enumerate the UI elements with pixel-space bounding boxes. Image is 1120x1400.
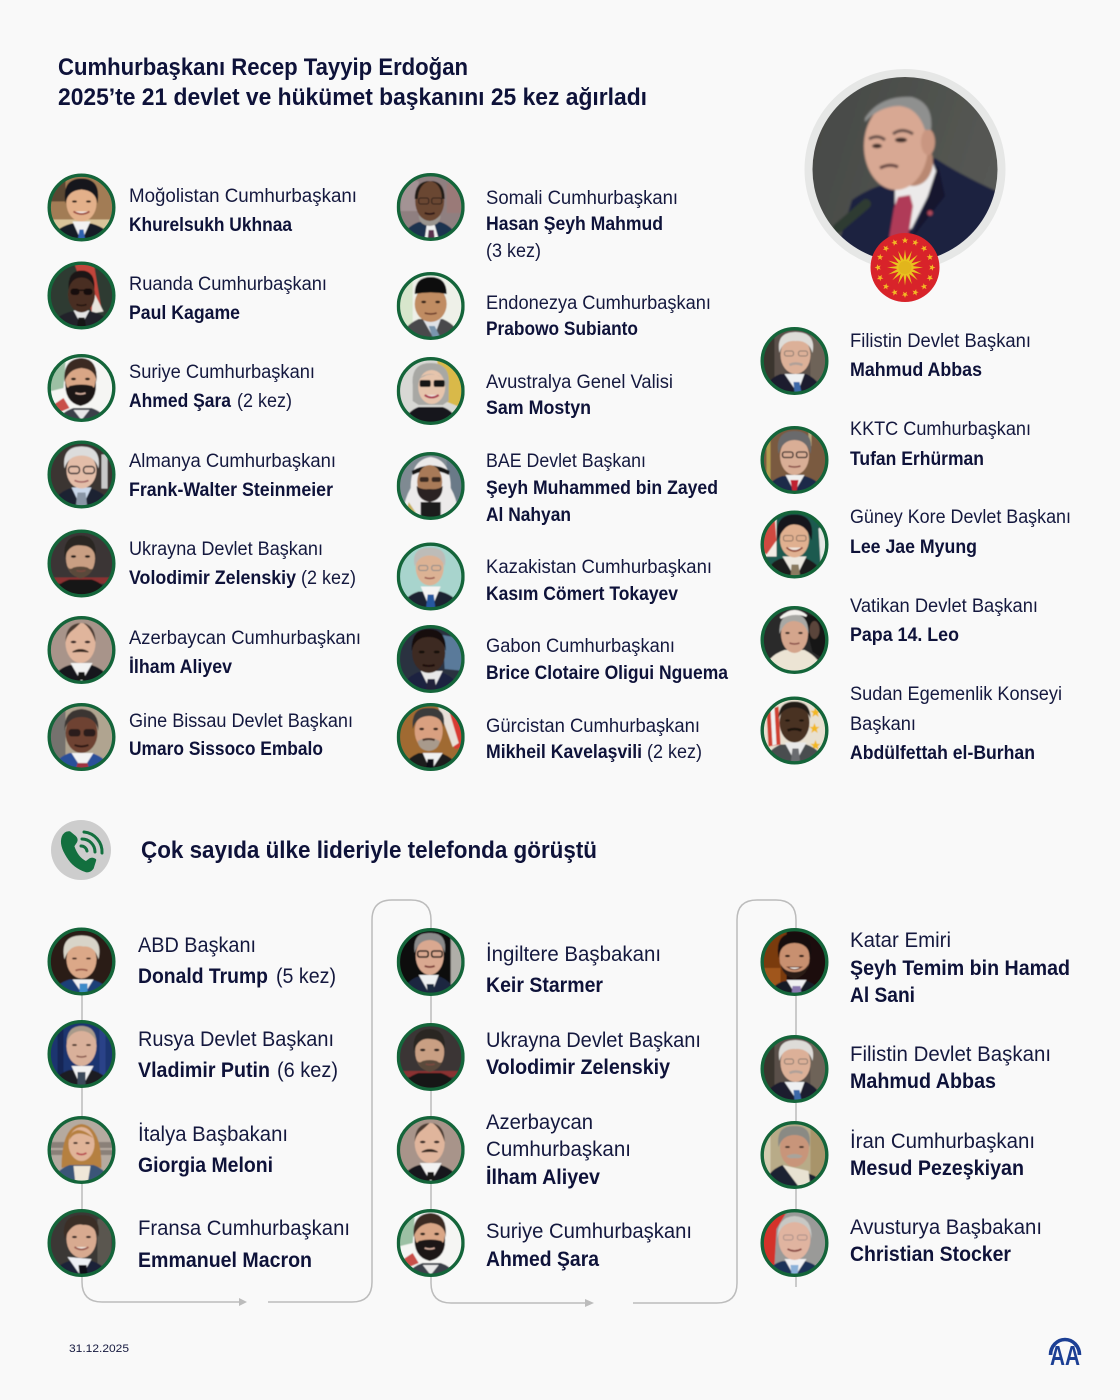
person: Frank-Walter Steinmeier [48,440,336,508]
person: Volodimir Zelenskiy (call): Volodimir Zelenskiy [486,1055,670,1079]
person: Lee Jae Myung: Güney Kore Devlet Başkanı [850,507,1071,528]
icon: presidential seal [870,233,940,302]
person: Umaro Sissoco Embalo: Umaro Sissoco Embalo [129,739,323,760]
title: 2025’te 21 devlet ve hükümet başkanını 25 kez ağırladı [58,84,647,111]
person: Donald Trump: Donald Trump [138,964,268,988]
person: Vladimir Putin [48,1020,338,1088]
person: Prabowo Subianto: Prabowo Subianto [486,319,638,340]
arrow: connector from column 1 [82,990,247,1306]
person: Frank-Walter Steinmeier: Frank-Walter Steinmeier [129,480,334,501]
person: Brice Clotaire Oligui Nguema [397,625,728,693]
logo: AA: AA [1050,1340,1080,1371]
person: Khurelsukh Ukhnaa: Moğolistan Cumhurbaşkanı [129,186,357,207]
person: Ahmed Şara (call): Ahmed Şara [486,1247,600,1271]
person: Abdülfettah el-Burhan: Başkanı [850,714,916,735]
person: Ahmed Şara (call): Suriye Cumhurbaşkanı [486,1219,692,1243]
person: Volodimir Zelenskiy: Volodimir Zelenskiy [129,568,296,589]
person: Hasan Şeyh Mahmud: Somali Cumhurbaşkanı [486,188,678,209]
person: Donald Trump: (5 kez) [276,964,336,988]
person: Giorgia Meloni: Giorgia Meloni [138,1153,273,1177]
panel: calls column 2 [397,928,701,1277]
person: Şeyh Temim bin Hamad Al Sani: Şeyh Temim bin Hamad [850,956,1070,980]
person: Volodimir Zelenskiy [48,530,356,598]
person: Volodimir Zelenskiy: Ukrayna Devlet Başkanı [129,539,323,560]
person: İlham Aliyev (call): Cumhurbaşkanı [486,1137,631,1161]
person: Papa 14. Leo: Papa 14. Leo [850,625,959,646]
person: Şeyh Temim bin Hamad Al Sani [760,928,1070,1007]
person: Umaro Sissoco Embalo: Gine Bissau Devlet Başkanı [129,711,353,732]
person: Şeyh Muhammed bin Zayed Al Nahyan: BAE Devlet Başkanı [486,451,646,472]
icon: phone [51,820,111,880]
person: Şeyh Muhammed bin Zayed Al Nahyan: Şeyh Muhammed bin Zayed [486,478,718,499]
person: Abdülfettah el-Burhan [760,684,1062,764]
person: Keir Starmer: İngiltere Başbakanı [486,942,661,966]
person: Mesud Pezeşkiyan [760,1121,1035,1189]
person: İlham Aliyev: Azerbaycan Cumhurbaşkanı [129,628,361,649]
date: 31.12.2025 [69,1343,129,1355]
panel: guests column 3 [760,327,1071,764]
person: Mahmud Abbas [760,327,1031,395]
person: Mesud Pezeşkiyan: Mesud Pezeşkiyan [850,1156,1024,1180]
person: Emmanuel Macron [48,1209,350,1277]
person: Hasan Şeyh Mahmud: Hasan Şeyh Mahmud [486,214,663,235]
person: Keir Starmer: Keir Starmer [486,973,604,997]
person: Khurelsukh Ukhnaa [48,174,357,242]
person: Ahmed Şara: Suriye Cumhurbaşkanı [129,362,315,383]
person: Vladimir Putin: Vladimir Putin [138,1058,270,1082]
person: Tufan Erhürman: Tufan Erhürman [850,449,984,470]
person: Kasım Cömert Tokayev: Kazakistan Cumhurbaşkanı [486,557,712,578]
person: Ahmed Şara [48,354,315,422]
person: Şeyh Temim bin Hamad Al Sani: Katar Emiri [850,928,951,952]
person: Mahmud Abbas (call) [760,1035,1051,1103]
person: Şeyh Temim bin Hamad Al Sani: Al Sani [850,983,915,1007]
person: İlham Aliyev: İlham Aliyev [129,657,232,678]
person: Umaro Sissoco Embalo [48,703,353,771]
heading: phone calls: Çok sayıda ülke lideriyle telefonda görüştü [141,837,597,864]
person: Şeyh Muhammed bin Zayed Al Nahyan: Al Nahyan [486,505,571,526]
person: Mahmud Abbas (call): Mahmud Abbas [850,1069,996,1093]
person: Lee Jae Myung: Lee Jae Myung [850,537,977,558]
person: Khurelsukh Ukhnaa: Khurelsukh Ukhnaa [129,215,292,236]
person: Mahmud Abbas: Mahmud Abbas [850,360,982,381]
person: Brice Clotaire Oligui Nguema: Brice Clotaire Oligui Nguema [486,663,728,684]
person: Keir Starmer [397,928,661,997]
person: Papa 14. Leo [760,596,1038,674]
person: Emmanuel Macron: Fransa Cumhurbaşkanı [138,1216,350,1240]
person: Paul Kagame: Ruanda Cumhurbaşkanı [129,274,327,295]
title [58,54,647,111]
arrow: connector from column 3 [633,900,796,1303]
person: Mikheil Kavelaşvili: Gürcistan Cumhurbaşkanı [486,716,700,737]
main portrait: Erdoğan [804,69,1006,302]
person: Giorgia Meloni [48,1116,288,1184]
person: Papa 14. Leo: Vatikan Devlet Başkanı [850,596,1038,617]
person: Kasım Cömert Tokayev [397,542,712,610]
person: Donald Trump [48,928,336,996]
person: Mikheil Kavelaşvili: Mikheil Kavelaşvili [486,742,642,763]
arrow: connector from column 2 [268,900,594,1307]
person: Lee Jae Myung [760,507,1071,578]
panel: calls column 1 [48,928,350,1277]
person: Volodimir Zelenskiy (call) [397,1023,701,1091]
person: Giorgia Meloni: İtalya Başbakanı [138,1122,288,1146]
person: Christian Stocker: Avusturya Başbakanı [850,1215,1042,1239]
person: Christian Stocker [760,1209,1042,1277]
person: Volodimir Zelenskiy: (2 kez) [301,568,356,589]
panel: guests column 2 [397,173,728,771]
person: Brice Clotaire Oligui Nguema: Gabon Cumhurbaşkanı [486,636,675,657]
person: Mahmud Abbas (call): Filistin Devlet Başkanı [850,1042,1051,1066]
person: Hasan Şeyh Mahmud: (3 kez) [486,241,541,262]
person: Donald Trump: ABD Başkanı [138,933,256,957]
person: Mikheil Kavelaşvili: (2 kez) [647,742,702,763]
person: İlham Aliyev [48,616,361,684]
person: Vladimir Putin: (6 kez) [277,1058,338,1082]
person: Ahmed Şara: Ahmed Şara [129,391,231,412]
person: Sam Mostyn: Avustralya Genel Valisi [486,372,673,393]
person: Vladimir Putin: Rusya Devlet Başkanı [138,1027,334,1051]
person: İlham Aliyev (call) [397,1110,631,1189]
person: Ahmed Şara (call) [397,1209,692,1277]
title: Cumhurbaşkanı Recep Tayyip Erdoğan [58,54,468,81]
person: Mahmud Abbas: Filistin Devlet Başkanı [850,331,1031,352]
person: Hasan Şeyh Mahmud [397,173,678,262]
person: Mikheil Kavelaşvili [397,703,702,771]
panel: guests column 1 [48,174,361,771]
person: Christian Stocker: Christian Stocker [850,1242,1012,1266]
person: Kasım Cömert Tokayev: Kasım Cömert Tokayev [486,584,678,605]
person: Tufan Erhürman: KKTC Cumhurbaşkanı [850,419,1031,440]
person: Paul Kagame: Paul Kagame [129,303,240,324]
person: Şeyh Muhammed bin Zayed Al Nahyan [397,451,718,526]
person: İlham Aliyev (call): İlham Aliyev [486,1165,600,1189]
person: Emmanuel Macron: Emmanuel Macron [138,1248,312,1272]
person: Abdülfettah el-Burhan: Sudan Egemenlik Konseyi [850,684,1062,705]
person: Volodimir Zelenskiy (call): Ukrayna Devlet Başkanı [486,1028,701,1052]
person: Paul Kagame [48,262,327,330]
person: Prabowo Subianto [397,272,711,340]
person: Ahmed Şara: (2 kez) [237,391,292,412]
panel: calls column 3 [760,928,1070,1277]
person: Tufan Erhürman [760,419,1031,494]
person: Mesud Pezeşkiyan: İran Cumhurbaşkanı [850,1129,1035,1153]
person: Sam Mostyn [397,357,673,425]
person: Abdülfettah el-Burhan: Abdülfettah el-Burhan [850,743,1035,764]
person: Frank-Walter Steinmeier: Almanya Cumhurbaşkanı [129,451,336,472]
person: Prabowo Subianto: Endonezya Cumhurbaşkanı [486,293,711,314]
person: İlham Aliyev (call): Azerbaycan [486,1110,593,1134]
person: Sam Mostyn: Sam Mostyn [486,398,591,419]
